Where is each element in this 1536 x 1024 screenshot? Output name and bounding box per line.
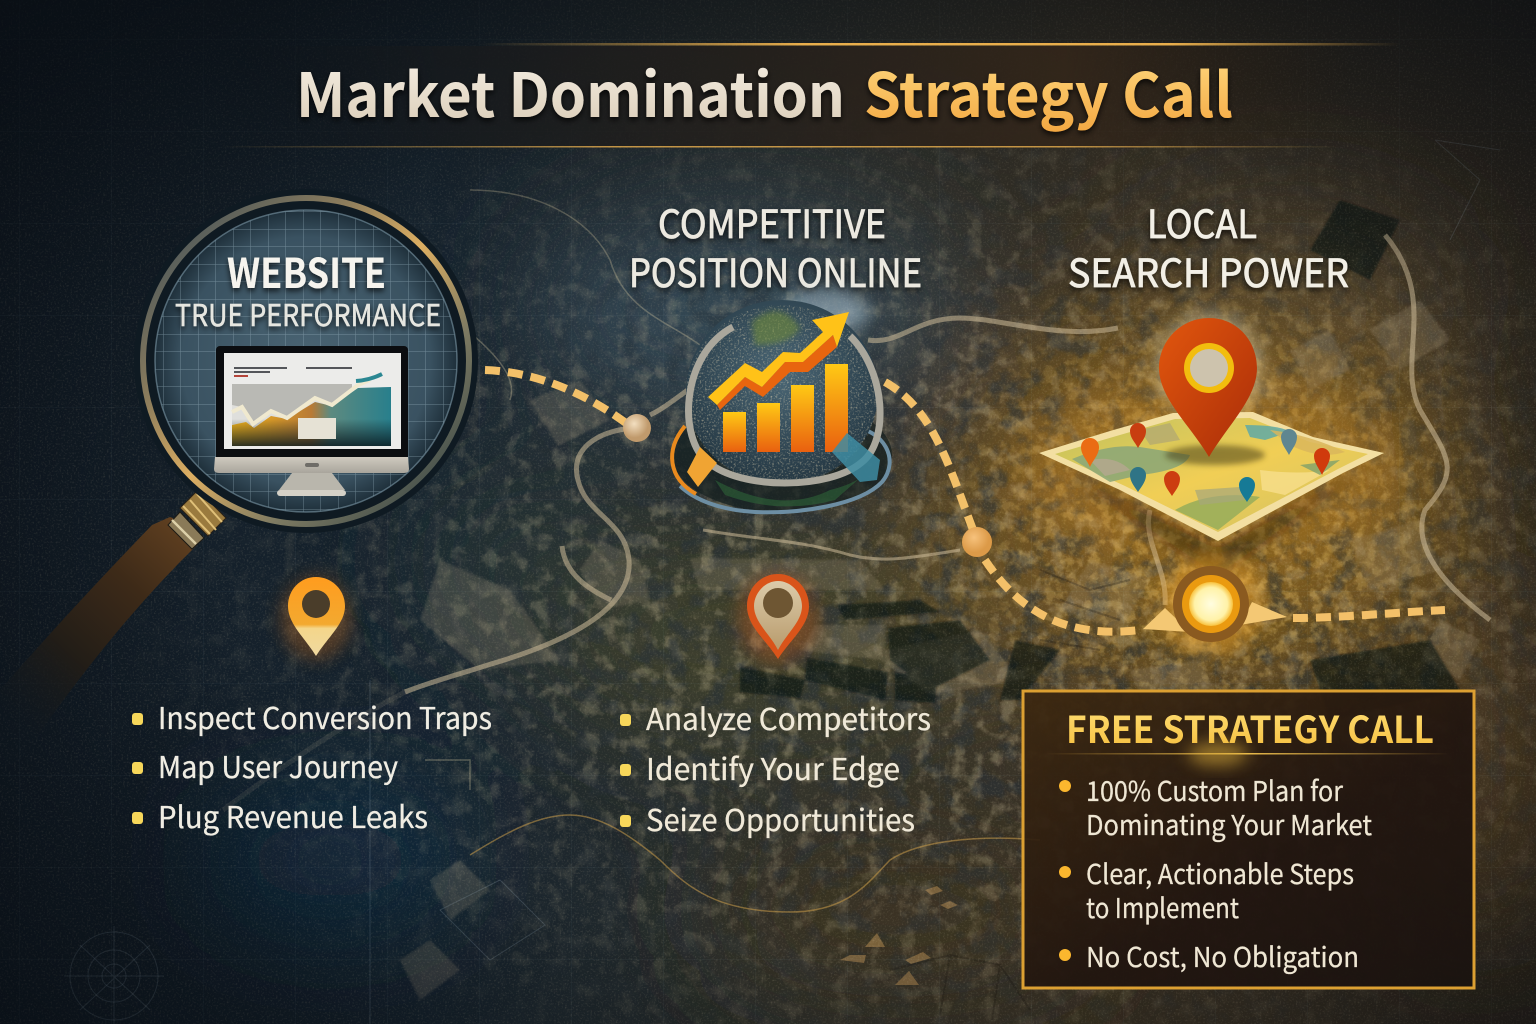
title banner: [210, 43, 1400, 148]
icon: map with location pins: [1020, 312, 1400, 575]
main location pin: [1155, 312, 1263, 457]
bullets: competitive: Analyze Competitors: [646, 695, 931, 739]
handle: [0, 490, 226, 765]
panel bullets: No Cost, No Obligation: [1086, 935, 1359, 975]
icon: pin competitive: [738, 572, 818, 664]
bullets: competitive: Seize Opportunities: [646, 796, 915, 840]
icon: globe with growth chart: [672, 290, 892, 512]
folded map: [1039, 412, 1384, 541]
title text: [296, 46, 1233, 135]
magnifying glass: [0, 189, 478, 765]
panel heading: FREE STRATEGY CALL: [1066, 700, 1434, 754]
panel bullets: [1059, 769, 1372, 975]
bullets: website: [132, 694, 492, 837]
dashed route: [485, 370, 1445, 632]
bullets: website: Map User Journey: [158, 743, 398, 787]
bullets: competitive: [620, 695, 931, 840]
route node left: [623, 414, 651, 442]
panel bullets: Clear, Actionable Steps: [1086, 852, 1354, 892]
heading: local search power: [1068, 194, 1349, 299]
route node middle: [962, 527, 992, 557]
bullets: website: Inspect Conversion Traps: [158, 694, 492, 738]
bullets: website: Plug Revenue Leaks: [158, 793, 428, 837]
panel: free strategy call: [1023, 691, 1474, 988]
bullets: competitive: Identify Your Edge: [646, 745, 900, 789]
monitor with chart: [214, 346, 409, 496]
panel bullets: Dominating Your Market: [1086, 803, 1372, 843]
icon: pin website: [280, 576, 352, 660]
heading: competitive position online: POSITION ONLINE: [629, 243, 922, 299]
bars: [723, 364, 848, 452]
title text: Strategy Call: [864, 46, 1233, 135]
lens heading: TRUE PERFORMANCE: [175, 291, 441, 335]
icon: glowing start node: [1143, 552, 1287, 656]
heading: competitive position online: [629, 194, 922, 299]
panel bullets: 100% Custom Plan for: [1086, 769, 1343, 809]
magnifier handles: [687, 447, 717, 487]
growth arrow: [708, 312, 849, 410]
small map pins: [1081, 423, 1330, 502]
heading: local search power: LOCAL: [1147, 194, 1257, 250]
panel bullets: to Implement: [1086, 886, 1239, 926]
heading: competitive position online: COMPETITIVE: [658, 194, 886, 250]
lens heading: [175, 240, 441, 335]
title text: Market Domination: [296, 46, 845, 135]
lens heading: WEBSITE: [227, 240, 386, 300]
heading: local search power: SEARCH POWER: [1068, 243, 1349, 299]
